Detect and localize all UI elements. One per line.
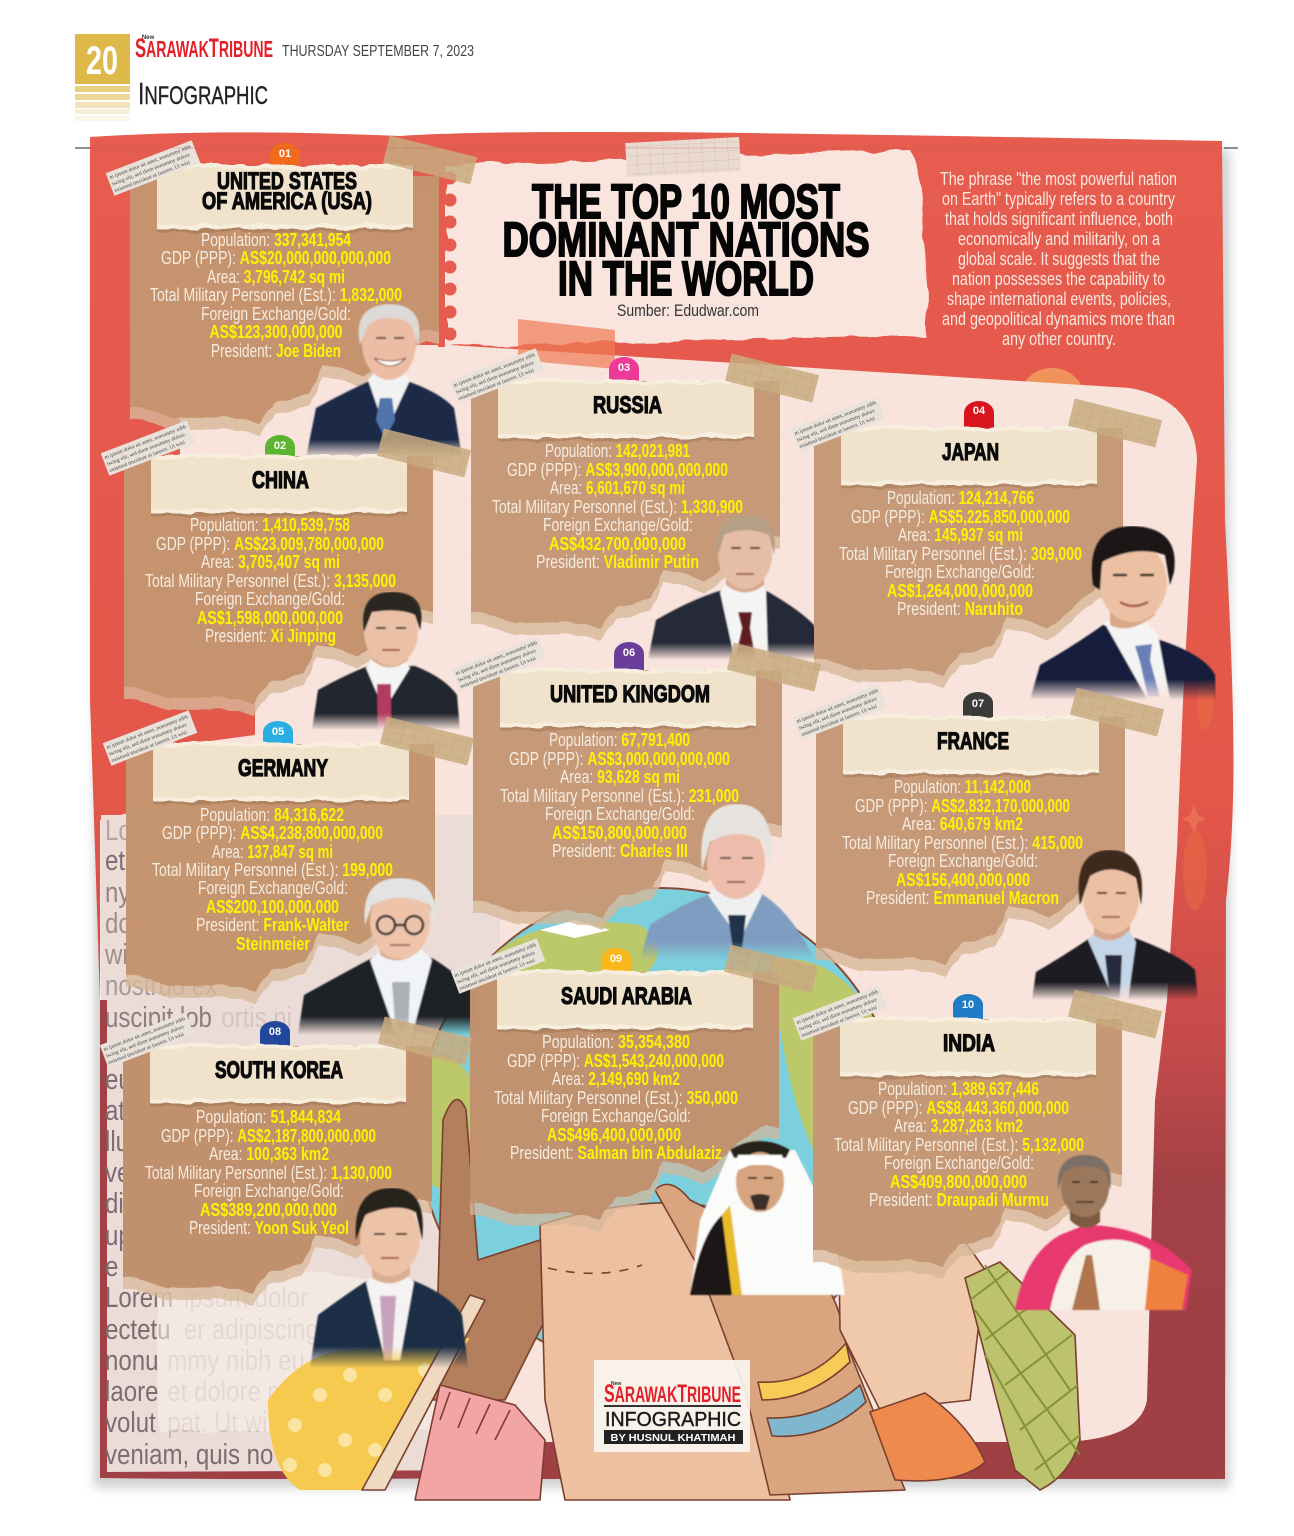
tape xyxy=(378,1017,472,1065)
bracelet blue xyxy=(767,1385,866,1436)
header strip xyxy=(490,668,766,730)
brown paper xyxy=(117,168,452,422)
country name: GERMANY xyxy=(238,755,328,782)
torn lower layer xyxy=(471,534,780,641)
card: France xyxy=(793,684,1198,1000)
newspaper strip: iscing elit, sed diam nonummy dolore xyxy=(798,997,878,1033)
number badge 05: 05 xyxy=(272,726,284,738)
title note xyxy=(438,137,928,369)
statistics xyxy=(145,1107,392,1238)
country name: OF AMERICA (USA) xyxy=(202,188,372,215)
statistics: Steinmeier xyxy=(236,934,310,954)
statistics xyxy=(839,488,1082,619)
statistics: GDP (PPP): AS$3,000,000,000,000 xyxy=(509,749,730,769)
header strip xyxy=(830,1017,1106,1079)
newspaper masthead: SARAWAKTRIBUNE xyxy=(135,33,273,63)
photo: Naruhito xyxy=(1030,526,1216,700)
newspaper strip: m ipsum dolor sit amet, nonummy nibh xyxy=(109,144,192,181)
newspaper strip: euismod tincidunt ut laoreet. Ut wisi xyxy=(109,439,186,474)
photo: Charles III xyxy=(640,804,815,960)
statistics: Area: 640,679 km2 xyxy=(902,814,1023,834)
logo box: INFOGRAPHIC xyxy=(605,1409,741,1431)
newspaper strip: m ipsum dolor sit amet, nonummy nibh xyxy=(106,714,189,751)
country name: SAUDI ARABIA xyxy=(561,983,692,1010)
brown paper xyxy=(803,709,1138,963)
lorem ipsum paper: dignissim xyxy=(105,1187,205,1220)
statistics: Area: 93,628 sq mi xyxy=(560,767,680,787)
number badge 09: 09 xyxy=(610,953,622,965)
statistics: Foreign Exchange/Gold: xyxy=(884,1153,1034,1173)
lorem ipsum paper: Lorem xyxy=(105,1281,173,1314)
newspaper strip xyxy=(100,1012,194,1068)
statistics: Total Military Personnel (Est.): 199,000 xyxy=(152,860,393,880)
statistics: Area: 3,705,407 sq mi xyxy=(201,552,340,572)
statistics: Total Military Personnel (Est.): 1,832,000 xyxy=(150,285,402,305)
tape xyxy=(725,354,819,402)
number badge 03 xyxy=(609,357,639,382)
lorem ipsum paper: Lo xyxy=(105,814,132,847)
cream paper xyxy=(100,345,1197,1442)
tape on note xyxy=(625,137,741,177)
header strip xyxy=(140,1044,416,1106)
main title: THE TOP 10 MOST xyxy=(532,176,840,229)
brown paper xyxy=(460,662,795,916)
statistics: Area: 100,363 km2 xyxy=(209,1144,329,1164)
lorem ipsum paper: wisi enim a xyxy=(104,938,224,971)
lorem ipsum paper: ny nibh e xyxy=(105,876,203,909)
country name: UNITED KINGDOM xyxy=(550,681,710,708)
brown paper xyxy=(111,448,446,702)
statistics: Foreign Exchange/Gold: xyxy=(543,515,693,535)
statistics: GDP (PPP): AS$5,225,850,000,000 xyxy=(851,507,1070,527)
newspaper strip: m ipsum dolor sit amet, nonummy nibh xyxy=(103,1016,186,1053)
statistics: GDP (PPP): AS$2,832,170,000,000 xyxy=(855,796,1070,816)
tape xyxy=(383,136,477,184)
sparks xyxy=(1182,670,1213,910)
statistics: Foreign Exchange/Gold: xyxy=(545,804,695,824)
statistics: President: Emmanuel Macron xyxy=(866,888,1059,908)
brown paper xyxy=(801,420,1136,674)
newspaper masthead: New xyxy=(142,35,154,41)
statistics: President: Joe Biden xyxy=(211,341,341,361)
statistics: President: Naruhito xyxy=(897,599,1023,619)
newspaper strip xyxy=(791,396,885,452)
statistics: AS$156,400,000,000 xyxy=(896,870,1030,890)
intro paragraph: that holds significant influence, both xyxy=(945,209,1173,229)
hand: peach centre xyxy=(540,1203,790,1500)
bracelet yellow xyxy=(758,1343,850,1400)
statistics: Foreign Exchange/Gold: xyxy=(195,589,345,609)
card: Germany xyxy=(103,710,480,1035)
sleeve: pink xyxy=(415,1385,545,1500)
statistics: AS$123,300,000,000 xyxy=(210,322,342,342)
statistics: GDP (PPP): AS$3,900,000,000,000 xyxy=(507,460,728,480)
orange tape xyxy=(518,319,615,369)
card: China xyxy=(101,420,471,730)
lorem ipsum paper: ate velit xyxy=(105,1094,188,1127)
number badge 04 xyxy=(964,401,994,430)
statistics: Population: 84,316,622 xyxy=(200,805,344,825)
torn lower layer xyxy=(110,1050,445,1304)
statistics: GDP (PPP): AS$2,187,800,000,000 xyxy=(161,1126,376,1146)
newspaper strip xyxy=(101,420,195,476)
hand: brown left xyxy=(430,1100,560,1400)
statistics: Population: 337,341,954 xyxy=(201,230,351,250)
card: Saudi Arabia xyxy=(451,938,845,1295)
card: United States xyxy=(106,136,477,458)
statistics: AS$1,598,000,000,000 xyxy=(197,608,343,628)
date: THURSDAY SEPTEMBER 7, 2023 xyxy=(282,43,474,60)
statistics: Population: 11,142,000 xyxy=(894,777,1031,797)
tape xyxy=(1068,399,1162,447)
torn lower layer xyxy=(130,329,439,436)
statistics xyxy=(150,230,402,361)
section name: INFOGRAPHIC xyxy=(138,76,268,111)
logo box: BY HUSNUL KHATIMAH xyxy=(610,1433,736,1444)
newspaper strip: iscing elit, sed diam nonummy dolore xyxy=(108,722,188,758)
card: Japan xyxy=(791,396,1216,700)
statistics: Area: 3,287,263 km2 xyxy=(894,1116,1023,1136)
intro paragraph: on Earth" typically refers to a country xyxy=(942,189,1175,209)
statistics: Total Military Personnel (Est.): 3,135,000 xyxy=(145,571,396,591)
number badge 10 xyxy=(953,994,983,1022)
statistics: Area: 145,937 sq mi xyxy=(898,525,1023,545)
statistics: GDP (PPP): AS$1,543,240,000,000 xyxy=(507,1051,724,1071)
number badge 02 xyxy=(265,435,295,458)
number badge 10: 10 xyxy=(962,999,974,1011)
newspaper strip: iscing elit, sed diam nonummy dolore xyxy=(798,696,878,732)
newspaper strip: euismod tincidunt ut laoreet. Ut wisi xyxy=(801,703,878,738)
lorem ipsum paper: volut xyxy=(105,1406,156,1439)
brown paper xyxy=(800,1011,1135,1265)
newspaper strip: iscing elit, sed diam nonummy dolore xyxy=(105,1024,185,1060)
card: South Korea xyxy=(100,1012,472,1368)
newspaper strip: m ipsum dolor sit amet, nonummy nibh xyxy=(796,688,879,725)
statistics: President: Salman bin Abdulaziz xyxy=(510,1143,722,1163)
statistics xyxy=(492,441,743,572)
card: Russia xyxy=(450,348,822,660)
newspaper strip xyxy=(793,684,887,740)
statistics: Total Military Personnel (Est.): 1,130,000 xyxy=(145,1163,392,1183)
newspaper strip: euismod tincidunt ut laoreet. Ut wisi xyxy=(111,729,188,764)
brown paper xyxy=(458,373,793,627)
torn lower layer xyxy=(124,609,433,716)
statistics: Population: 124,214,766 xyxy=(887,488,1034,508)
torn lower layer xyxy=(800,1023,1135,1277)
statistics: Foreign Exchange/Gold: xyxy=(885,562,1035,582)
torn lower layer xyxy=(126,900,435,1004)
main title xyxy=(502,176,870,306)
newspaper strip: m ipsum dolor sit amet, nonummy nibh xyxy=(455,640,538,677)
header strip xyxy=(487,970,763,1032)
statistics: Area: 3,796,742 sq mi xyxy=(207,267,345,287)
tape xyxy=(727,643,821,691)
lorem ipsum paper: laore xyxy=(105,1375,158,1408)
statistics: Foreign Exchange/Gold: xyxy=(194,1181,344,1201)
newspaper strip: euismod tincidunt ut laoreet. Ut wisi xyxy=(801,1004,878,1039)
newspaper strip: m ipsum dolor sit amet, nonummy nibh xyxy=(454,942,537,979)
orange sun xyxy=(1018,368,1086,436)
lorem ipsum paper: dolore m xyxy=(105,907,199,940)
header strip xyxy=(833,715,1109,777)
statistics: GDP (PPP): AS$8,443,360,000,000 xyxy=(848,1098,1069,1118)
lorem ipsum paper: ipsum dolor xyxy=(184,1281,308,1314)
note paper xyxy=(445,150,928,346)
statistics xyxy=(152,805,393,954)
logo box: SARAWAKTRIBUNE xyxy=(604,1380,741,1408)
statistics: Population: 35,354,380 xyxy=(542,1032,690,1052)
statistics: Foreign Exchange/Gold: xyxy=(198,878,348,898)
newspaper strip xyxy=(450,348,544,404)
torn lower layer xyxy=(816,892,1084,977)
newspaper strip: iscing elit, sed diam nonummy dolore xyxy=(455,360,535,396)
statistics: Total Military Personnel (Est.): 231,000 xyxy=(500,786,739,806)
country name: RUSSIA xyxy=(593,392,662,419)
newspaper strip xyxy=(451,938,545,994)
diagonal strip xyxy=(362,1295,485,1490)
photo: Salman bin Abdulaziz xyxy=(690,1141,845,1295)
tape xyxy=(380,717,474,765)
number badge 07: 07 xyxy=(972,698,984,710)
photo: Vladimir Putin xyxy=(648,516,822,660)
lorem ipsum paper: et dolore m xyxy=(167,1375,288,1408)
photo: Emmanuel Macron xyxy=(1032,850,1198,1000)
statistics: President: Charles III xyxy=(552,841,688,861)
statistics: President: Vladimir Putin xyxy=(536,552,699,572)
tape xyxy=(1068,990,1162,1038)
number badge 08 xyxy=(260,1021,290,1050)
statistics: GDP (PPP): AS$4,238,800,000,000 xyxy=(162,823,383,843)
newspaper strip xyxy=(106,140,200,196)
newspaper strip: m ipsum dolor sit amet, nonummy nibh xyxy=(794,400,877,437)
header strip xyxy=(143,742,419,804)
country name: INDIA xyxy=(943,1030,995,1057)
statistics: AS$200,100,000,000 xyxy=(206,897,339,917)
photo: Frank-Walter Steinmeier xyxy=(298,878,480,1035)
statistics xyxy=(500,730,739,861)
statistics: AS$496,400,000,000 xyxy=(547,1125,681,1145)
statistics xyxy=(842,777,1083,908)
number badge 06: 06 xyxy=(623,647,635,659)
background panel xyxy=(90,132,1233,1488)
lorem ipsum paper: llum do xyxy=(105,1125,183,1158)
photo: Draupadi Murmu xyxy=(1015,1155,1192,1310)
country name: FRANCE xyxy=(937,728,1009,755)
country name: SOUTH KOREA xyxy=(215,1057,343,1084)
statistics: Area: 137,847 sq mi xyxy=(212,842,333,862)
statistics: GDP (PPP): AS$23,009,780,000,000 xyxy=(156,534,384,554)
statistics: President: Draupadi Murmu xyxy=(869,1190,1049,1210)
sleeve: orange xyxy=(870,1393,985,1481)
country name: UNITED STATES xyxy=(217,168,357,195)
number badge 01 xyxy=(270,143,300,170)
number badge 07 xyxy=(963,692,993,722)
newspaper strip xyxy=(793,985,887,1041)
intro paragraph: any other country. xyxy=(1002,329,1116,349)
number badge 02: 02 xyxy=(274,440,286,452)
statistics: President: Xi Jinping xyxy=(205,626,336,646)
statistics xyxy=(494,1032,738,1163)
newspaper strip: euismod tincidunt ut laoreet. Ut wisi xyxy=(799,415,876,450)
card: India xyxy=(793,985,1192,1310)
header strip xyxy=(141,454,417,516)
statistics: AS$389,200,000,000 xyxy=(200,1200,337,1220)
dark red bottom band xyxy=(440,1442,1225,1479)
newspaper strip: euismod tincidunt ut laoreet. Ut wisi xyxy=(460,655,537,690)
statistics: Population: 1,389,637,446 xyxy=(878,1079,1039,1099)
country name: JAPAN xyxy=(942,439,999,466)
lorem ipsum paper: ectetu xyxy=(105,1313,171,1346)
statistics: Population: 51,844,834 xyxy=(196,1107,341,1127)
newspaper strip: iscing elit, sed diam nonummy dolore xyxy=(111,152,191,188)
header strip xyxy=(488,379,764,441)
statistics: President: Yoon Suk Yeol xyxy=(189,1218,349,1238)
brown paper xyxy=(113,736,448,990)
photo: Joe Biden xyxy=(306,304,462,458)
page number block: 20 xyxy=(86,39,118,83)
newspaper strip: m ipsum dolor sit amet, nonummy nibh xyxy=(796,989,879,1026)
intro paragraph: economically and militarily, on a xyxy=(958,229,1161,249)
statistics: Total Military Personnel (Est.): 350,000 xyxy=(494,1088,738,1108)
newspaper strip xyxy=(103,710,197,766)
lorem ipsum paper: nostrud ex xyxy=(105,969,218,1002)
statistics: President: Frank-Walter xyxy=(196,915,349,935)
number badge 06 xyxy=(614,642,644,672)
number badge 08: 08 xyxy=(269,1026,281,1038)
lorem ipsum paper: veniam, quis no xyxy=(105,1438,273,1471)
newspaper strip: euismod tincidunt ut laoreet. Ut wisi xyxy=(114,159,191,194)
lorem ipsum paper: mmy nibh eu xyxy=(167,1344,305,1377)
statistics xyxy=(145,515,396,646)
header strip xyxy=(147,164,423,232)
photo: Xi Jinping xyxy=(312,592,460,730)
photo: Yoon Suk Yeol xyxy=(310,1188,468,1368)
newspaper strip xyxy=(452,636,546,692)
registration lines xyxy=(75,147,1238,149)
lorem ipsum paper: uptatum xyxy=(105,1219,192,1252)
globe illustration xyxy=(418,888,902,1372)
newspaper strip: m ipsum dolor sit amet, nonummy nibh xyxy=(453,352,536,389)
newspaper strip: iscing elit, sed diam nonummy dolore xyxy=(456,950,536,986)
brown paper xyxy=(110,1038,445,1292)
statistics: Area: 6,601,670 sq mi xyxy=(550,478,685,498)
statistics: Population: 67,791,400 xyxy=(549,730,690,750)
source: Sumber: Edudwar.com xyxy=(617,301,759,320)
lorem ipsum paper: eum xyxy=(105,1063,152,1096)
stitches xyxy=(548,1265,642,1273)
lorem ipsum paper: uscipit lob xyxy=(105,1001,212,1034)
number badge 04: 04 xyxy=(973,405,986,417)
lorem ipsum paper: vero xyxy=(105,1156,152,1189)
note holes xyxy=(438,165,456,347)
lorem ipsum paper: nonu xyxy=(105,1344,159,1377)
intro paragraph: shape international events, policies, xyxy=(947,289,1171,309)
country name xyxy=(202,168,372,215)
statistics: AS$409,800,000,000 xyxy=(890,1172,1027,1192)
statistics: AS$1,264,000,000,000 xyxy=(887,581,1033,601)
tape xyxy=(1070,688,1164,736)
intro paragraph: nation possesses the capability to xyxy=(952,269,1165,289)
statistics: Total Military Personnel (Est.): 1,330,900 xyxy=(492,497,743,517)
brown paper xyxy=(457,964,792,1218)
main title: DOMINANT NATIONS xyxy=(502,214,870,267)
torn lower layer xyxy=(473,823,782,930)
statistics: Foreign Exchange/Gold: xyxy=(541,1106,691,1126)
logo box: New xyxy=(611,1381,621,1387)
lorem ipsum paper: pat. Ut wisi xyxy=(167,1406,285,1439)
tape xyxy=(377,429,471,477)
main title: IN THE WORLD xyxy=(558,253,814,306)
lorem ipsum paper: e feugait xyxy=(105,1250,198,1283)
hands illustration xyxy=(268,1100,1080,1500)
sleeve: green xyxy=(965,1262,1080,1490)
logo box xyxy=(594,1360,750,1452)
lorem ipsum paper: er adipiscing xyxy=(184,1313,319,1346)
tape xyxy=(724,945,818,993)
newspaper strip: euismod tincidunt ut laoreet. Ut wisi xyxy=(458,367,535,402)
page header xyxy=(75,33,474,121)
intro paragraph: global scale. It suggests that the xyxy=(958,249,1160,269)
statistics: AS$432,700,000,000 xyxy=(549,534,686,554)
statistics: Foreign Exchange/Gold: xyxy=(888,851,1038,871)
page number block xyxy=(75,34,130,121)
intro paragraph: The phrase "the most powerful nation xyxy=(940,169,1177,189)
lorem ipsum paper: etue xyxy=(105,844,152,877)
lorem ipsum paper: ortis ni xyxy=(221,1001,292,1034)
sleeve: yellow polka xyxy=(268,1338,470,1490)
statistics: Total Military Personnel (Est.): 415,000 xyxy=(842,833,1083,853)
newspaper strip: iscing elit, sed diam nonummy dolore xyxy=(796,408,876,444)
number badge 09 xyxy=(601,948,631,976)
newspaper strip: iscing elit, sed diam nonummy dolore xyxy=(457,648,537,684)
country name: CHINA xyxy=(252,467,309,494)
statistics: Area: 2,149,690 km2 xyxy=(552,1069,680,1089)
statistics xyxy=(834,1079,1084,1210)
number badge 03: 03 xyxy=(618,362,630,374)
card: United Kingdom xyxy=(452,636,821,960)
hand: light right xyxy=(838,1107,985,1410)
number badge 05 xyxy=(263,721,293,748)
lorem ipsum paper xyxy=(100,814,500,1478)
newspaper strip: euismod tincidunt ut laoreet. Ut wisi xyxy=(459,957,536,992)
torn lower layer xyxy=(814,588,1102,688)
newspaper strip: iscing elit, sed diam nonummy dolore xyxy=(106,432,186,468)
intro paragraph: and geopolitical dynamics more than xyxy=(942,309,1175,329)
intro paragraph xyxy=(940,169,1177,349)
hand: tan arm with bracelets xyxy=(655,1184,905,1495)
statistics: Total Military Personnel (Est.): 5,132,000 xyxy=(834,1135,1084,1155)
number badge 01: 01 xyxy=(279,148,291,160)
newspaper strip: m ipsum dolor sit amet, nonummy nibh xyxy=(104,424,187,461)
statistics: Population: 142,021,981 xyxy=(545,441,690,461)
torn lower layer xyxy=(470,1125,779,1232)
statistics: Total Military Personnel (Est.): 309,000 xyxy=(839,544,1082,564)
header strip xyxy=(831,426,1107,488)
statistics: GDP (PPP): AS$20,000,000,000,000 xyxy=(161,248,391,268)
statistics: Foreign Exchange/Gold: xyxy=(201,304,351,324)
statistics: AS$150,800,000,000 xyxy=(552,823,687,843)
newspaper strip: euismod tincidunt ut laoreet. Ut wisi xyxy=(108,1031,185,1066)
statistics: Population: 1,410,539,758 xyxy=(190,515,350,535)
